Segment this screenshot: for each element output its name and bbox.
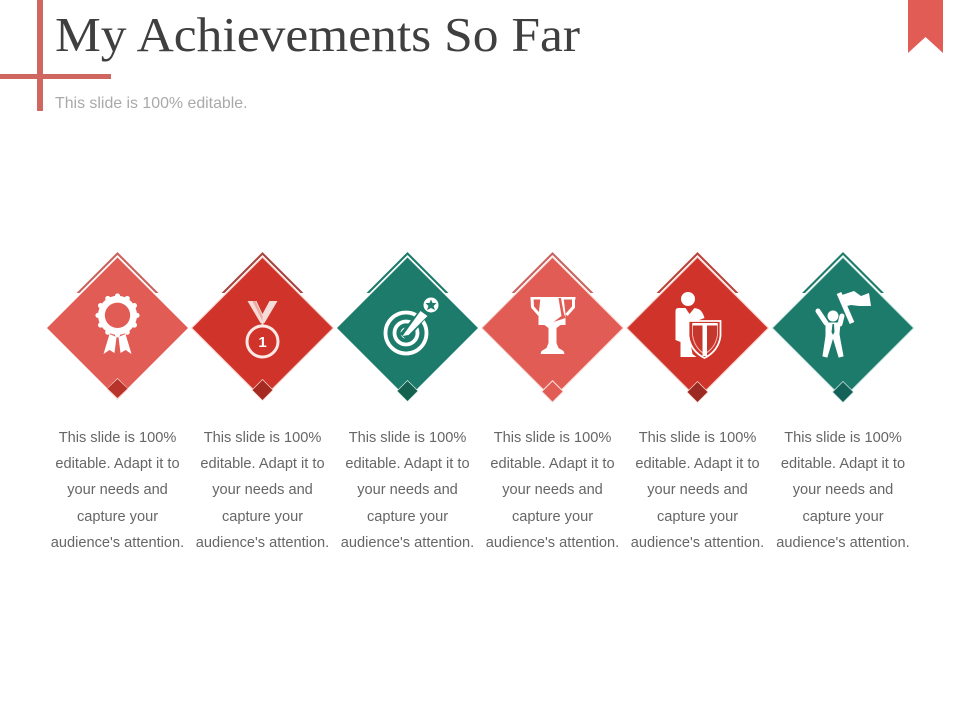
text block 2: capture your bbox=[222, 509, 303, 525]
text block 1: audience's attention. bbox=[51, 535, 184, 551]
diamond row bbox=[47, 252, 914, 403]
text block 6: editable. Adapt it to bbox=[781, 456, 905, 472]
text block 3: editable. Adapt it to bbox=[345, 456, 470, 472]
text block 4: capture your bbox=[512, 509, 593, 525]
text block 1: editable. Adapt it to bbox=[55, 456, 180, 472]
text block 4: audience's attention. bbox=[486, 535, 619, 551]
icon: person holding flag bbox=[818, 291, 871, 357]
text block 5 bbox=[631, 430, 764, 551]
text block 2: This slide is 100% bbox=[204, 430, 321, 446]
panel: shield diamond bbox=[626, 252, 769, 403]
text block 1: capture your bbox=[77, 509, 158, 525]
text block 1 bbox=[51, 430, 184, 551]
text block 4 bbox=[486, 430, 619, 551]
text block 4: This slide is 100% bbox=[494, 430, 611, 446]
panel: flag person diamond bbox=[772, 252, 914, 403]
decorative cross mark bbox=[0, 0, 111, 111]
icon: bookmark ribbon bbox=[908, 0, 943, 53]
text block 2: audience's attention. bbox=[196, 535, 329, 551]
text block 4: editable. Adapt it to bbox=[490, 456, 615, 472]
text block 1: your needs and bbox=[67, 482, 168, 498]
icon: trophy bbox=[530, 297, 576, 354]
text block 5: This slide is 100% bbox=[639, 430, 756, 446]
title: My Achievements So Far bbox=[55, 9, 580, 62]
panel: ribbon award diamond bbox=[47, 252, 188, 400]
panel: target diamond bbox=[337, 252, 478, 402]
text block 6: audience's attention. bbox=[776, 535, 910, 551]
subtitle: This slide is 100% editable. bbox=[55, 95, 248, 112]
text block 5: your needs and bbox=[647, 482, 748, 498]
panel: trophy diamond bbox=[481, 252, 624, 403]
text block 3: capture your bbox=[367, 509, 448, 525]
text block 5: audience's attention. bbox=[631, 535, 764, 551]
icon: rosette bbox=[95, 293, 140, 354]
icon: medal: 1 bbox=[258, 334, 267, 351]
text block 6: your needs and bbox=[793, 482, 893, 498]
icon: target with dart bbox=[386, 298, 438, 354]
text block 3: audience's attention. bbox=[341, 535, 474, 551]
text block 6: This slide is 100% bbox=[784, 430, 902, 446]
text block 2: editable. Adapt it to bbox=[200, 456, 325, 472]
panel: medal diamond bbox=[191, 252, 334, 401]
text block 1: This slide is 100% bbox=[59, 430, 176, 446]
text block 2 bbox=[196, 430, 329, 551]
text block 3: This slide is 100% bbox=[349, 430, 466, 446]
icon: person with shield bbox=[676, 292, 720, 358]
text block 4: your needs and bbox=[502, 482, 603, 498]
text block 5: capture your bbox=[657, 509, 738, 525]
icon: medal bbox=[247, 301, 278, 357]
text block 6 bbox=[776, 430, 910, 551]
text block 6: capture your bbox=[802, 509, 884, 525]
text block 5: editable. Adapt it to bbox=[635, 456, 760, 472]
text block 2: your needs and bbox=[212, 482, 313, 498]
text block 3: your needs and bbox=[357, 482, 458, 498]
text block 3 bbox=[341, 430, 474, 551]
